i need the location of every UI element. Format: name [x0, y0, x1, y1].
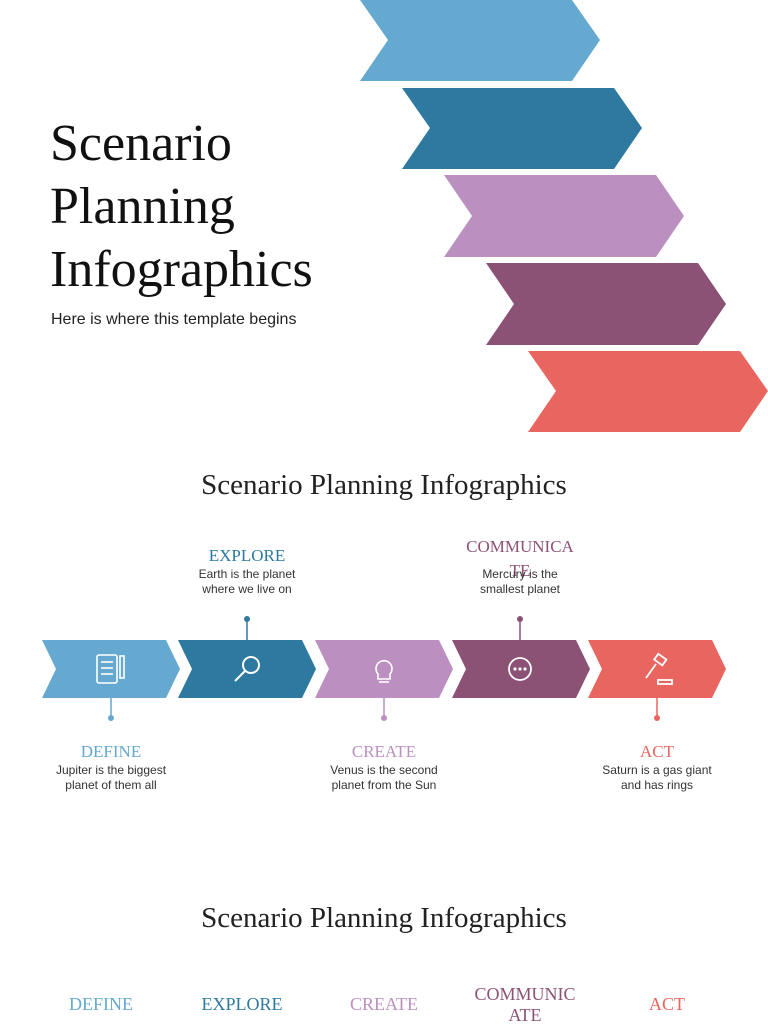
text: Earth is the planet where we live on	[199, 567, 295, 596]
chevron 3	[444, 175, 684, 257]
section heading 1: Scenario Planning Infographics	[201, 469, 567, 501]
label explore: EXPLORE	[209, 546, 285, 565]
bottom labels row: ATE	[508, 1005, 542, 1025]
section heading 2: Scenario Planning Infographics	[201, 902, 567, 934]
title: Planning	[50, 178, 235, 235]
text: Jupiter is the biggest planet of them all	[56, 763, 166, 792]
chevron 2	[402, 88, 642, 169]
subtitle: Here is where this template begins	[51, 311, 296, 328]
label communicate: COMMUNICA	[466, 537, 574, 556]
step create	[315, 640, 453, 698]
process chevrons	[42, 616, 726, 721]
bottom labels row: DEFINE	[69, 994, 133, 1014]
label act: ACT	[640, 742, 674, 761]
label create: CREATE	[352, 742, 416, 761]
title: Infographics	[50, 241, 313, 298]
chevron 4	[486, 263, 726, 345]
text: Mercury is the smallest planet	[480, 567, 560, 596]
bottom labels row: CREATE	[350, 994, 418, 1014]
step explore	[178, 640, 316, 698]
title	[50, 115, 313, 298]
bottom labels row: ACT	[649, 994, 685, 1014]
bottom labels row: EXPLORE	[202, 994, 282, 1014]
chevron 5	[528, 351, 768, 432]
step act	[588, 640, 726, 698]
text: Venus is the second planet from the Sun	[330, 763, 438, 792]
chevron 1	[360, 0, 600, 81]
text: Saturn is a gas giant and has rings	[602, 763, 712, 792]
title: Scenario	[50, 115, 232, 172]
text: TE	[510, 561, 530, 580]
connector lines	[108, 616, 660, 721]
step define	[42, 640, 180, 698]
bottom labels row: COMMUNIC	[474, 984, 576, 1004]
label define: DEFINE	[81, 742, 141, 761]
step communicate	[452, 640, 590, 698]
label communicate	[466, 537, 574, 580]
decorative top chevrons	[360, 0, 768, 432]
